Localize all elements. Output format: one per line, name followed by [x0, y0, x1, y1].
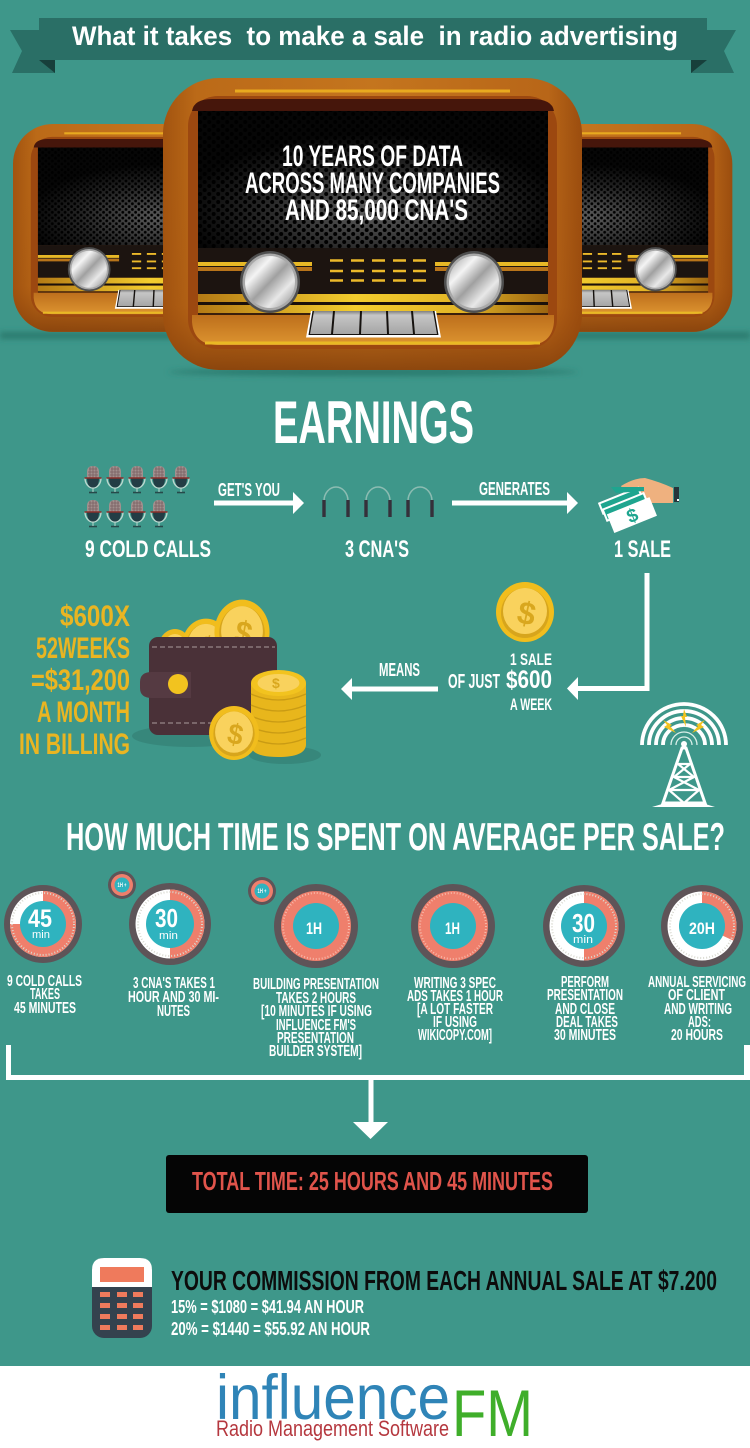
label: generates: GENERATES [479, 479, 550, 499]
timer: 20H servicing: 20H [689, 919, 715, 938]
timer: 45 min: 45 [28, 905, 52, 933]
icon: coin [496, 582, 554, 642]
logo: influenceFM [216, 1363, 533, 1448]
logo: influenceFM: influence [216, 1363, 450, 1433]
icon: calculator [92, 1258, 152, 1338]
arrow: means [341, 678, 438, 700]
label: 3 CNAs: 3 CNA'S [345, 536, 409, 563]
timer badge: 1H plus second: 1H + [258, 889, 267, 895]
radio: left [13, 124, 311, 332]
timer badge: 1H plus [108, 871, 136, 899]
caption: writing spec ads: [A LOT FASTER [417, 1001, 493, 1018]
icon: radio tower [642, 704, 726, 807]
caption: building presentation: TAKES 2 HOURS [276, 990, 356, 1007]
timer: 1H building [274, 884, 358, 968]
caption: cold calls: 45 MINUTES [14, 1000, 76, 1017]
caption: building presentation: INFLUENCE FM'S [276, 1017, 356, 1034]
bracket and arrow to total [6, 1045, 750, 1139]
timer: 30 min: min [159, 930, 178, 942]
title: What it takes to make a sale in radio advertising [72, 21, 678, 51]
arrow: to sale [452, 492, 578, 514]
caption: writing spec ads: WRITING 3 SPEC [414, 975, 496, 992]
timer: 1H building: 1H [306, 919, 322, 938]
icon: headphones [324, 487, 432, 517]
text: one sale of just $600 a week: A WEEK [510, 695, 552, 714]
text: one sale of just $600 a week: 1 SALE [510, 650, 552, 669]
text: monthly billing [19, 600, 130, 761]
icon: wallet with coins: $ [272, 675, 280, 691]
radio: center [163, 78, 582, 370]
timer: 45 min: min [32, 929, 50, 941]
caption: cold calls [7, 973, 82, 1017]
logo: influenceFM: Radio Management Software [216, 1416, 449, 1441]
timer: 30 min presentation: 30 [572, 908, 595, 938]
caption: writing spec ads: ADS TAKES 1 HOUR [407, 988, 503, 1005]
caption: building presentation: PRESENTATION [277, 1030, 354, 1047]
footer panel [0, 1366, 750, 1448]
caption: perform presentation: AND CLOSE [555, 1001, 615, 1018]
text: commission at 15%: 15% = $1080 = $41.94 AN HOUR [171, 1297, 364, 1317]
total time box [166, 1155, 588, 1213]
text: monthly billing: IN BILLING [19, 728, 130, 761]
label: means: MEANS [379, 660, 420, 680]
timer: 1H writing: 1H [445, 919, 460, 938]
caption: writing spec ads [407, 975, 503, 1044]
radio screen text [245, 140, 500, 227]
timer badge: 1H plus: 1H + [118, 883, 127, 889]
caption: cold calls: 9 COLD CALLS [7, 973, 82, 990]
icon: hand with money [598, 478, 679, 536]
timer: 30 min: 30 [155, 903, 178, 933]
label: 9 cold calls: 9 COLD CALLS [85, 536, 211, 563]
logo: influenceFM: FM [452, 1376, 533, 1448]
text: monthly billing: =$31,200 [31, 664, 130, 697]
radio screen text: ACROSS MANY COMPANIES [245, 167, 500, 200]
caption: CNAs: 3 CNA'S TAKES 1 [133, 975, 215, 992]
caption: annual servicing: 20 HOURS [671, 1027, 723, 1044]
caption: annual servicing: OF CLIENT [668, 987, 725, 1004]
timer: 30 min [129, 883, 211, 965]
caption: CNAs: HOUR AND 30 MI- [128, 989, 219, 1006]
radio screen text: 10 YEARS OF DATA [282, 140, 463, 173]
caption: perform presentation: PERFORM [561, 974, 609, 991]
icon: wallet with coins [132, 600, 321, 764]
total time box: TOTAL TIME: 25 HOURS AND 45 MINUTES [192, 1166, 553, 1196]
caption: building presentation: BUILDER SYSTEM] [269, 1043, 362, 1060]
timer: 30 min presentation: min [573, 934, 593, 946]
title banner [10, 18, 736, 73]
text: one sale of just $600 a week: $600 [506, 666, 552, 694]
caption: perform presentation: 30 MINUTES [554, 1027, 616, 1044]
heading: earnings: EARNINGS [273, 389, 474, 456]
icon: nine microphones [84, 466, 190, 526]
caption: writing spec ads: WIKICOPY.COM] [418, 1027, 492, 1044]
text: monthly billing: 52WEEKS [36, 632, 130, 665]
radio shadows [0, 332, 750, 376]
caption: annual servicing: ADS: [688, 1014, 711, 1031]
caption: building presentation: [10 MINUTES IF USING [261, 1003, 372, 1020]
caption: CNAs [128, 975, 219, 1020]
radio screen text: AND 85,000 CNA'S [285, 194, 468, 227]
timer: 20H servicing [661, 885, 743, 967]
text: one sale of just $600 a week: OF JUST [448, 671, 500, 693]
caption: cold calls: TAKES [30, 986, 60, 1003]
timer badge: 1H plus second [248, 877, 276, 905]
caption: perform presentation: PRESENTATION [547, 987, 623, 1004]
text: monthly billing: $600X [60, 600, 130, 633]
icon: hand with money: $ [624, 504, 642, 528]
label: 1 sale: 1 SALE [614, 536, 671, 563]
caption: building presentation [253, 976, 379, 1060]
caption: writing spec ads: IF USING [433, 1014, 477, 1031]
timer: 45 min [4, 885, 82, 963]
text: one sale of just $600 a week [448, 650, 552, 714]
arrow: to CNAs [214, 492, 304, 514]
text: monthly billing: A MONTH [37, 696, 130, 729]
label: gets you: GET'S YOU [218, 480, 280, 500]
arrow: elbow from sale [567, 573, 650, 700]
caption: building presentation: BUILDING PRESENTATION [253, 976, 379, 993]
caption: perform presentation [547, 974, 623, 1044]
caption: annual servicing [648, 974, 746, 1044]
caption: perform presentation: DEAL TAKES [556, 1014, 618, 1031]
caption: CNAs: NUTES [157, 1003, 190, 1020]
text: commission at 20%: 20% = $1440 = $55.92 AN HOUR [171, 1319, 370, 1339]
timer: 1H writing [411, 884, 495, 968]
radio: right [434, 124, 732, 332]
timer: 30 min presentation [543, 885, 625, 967]
